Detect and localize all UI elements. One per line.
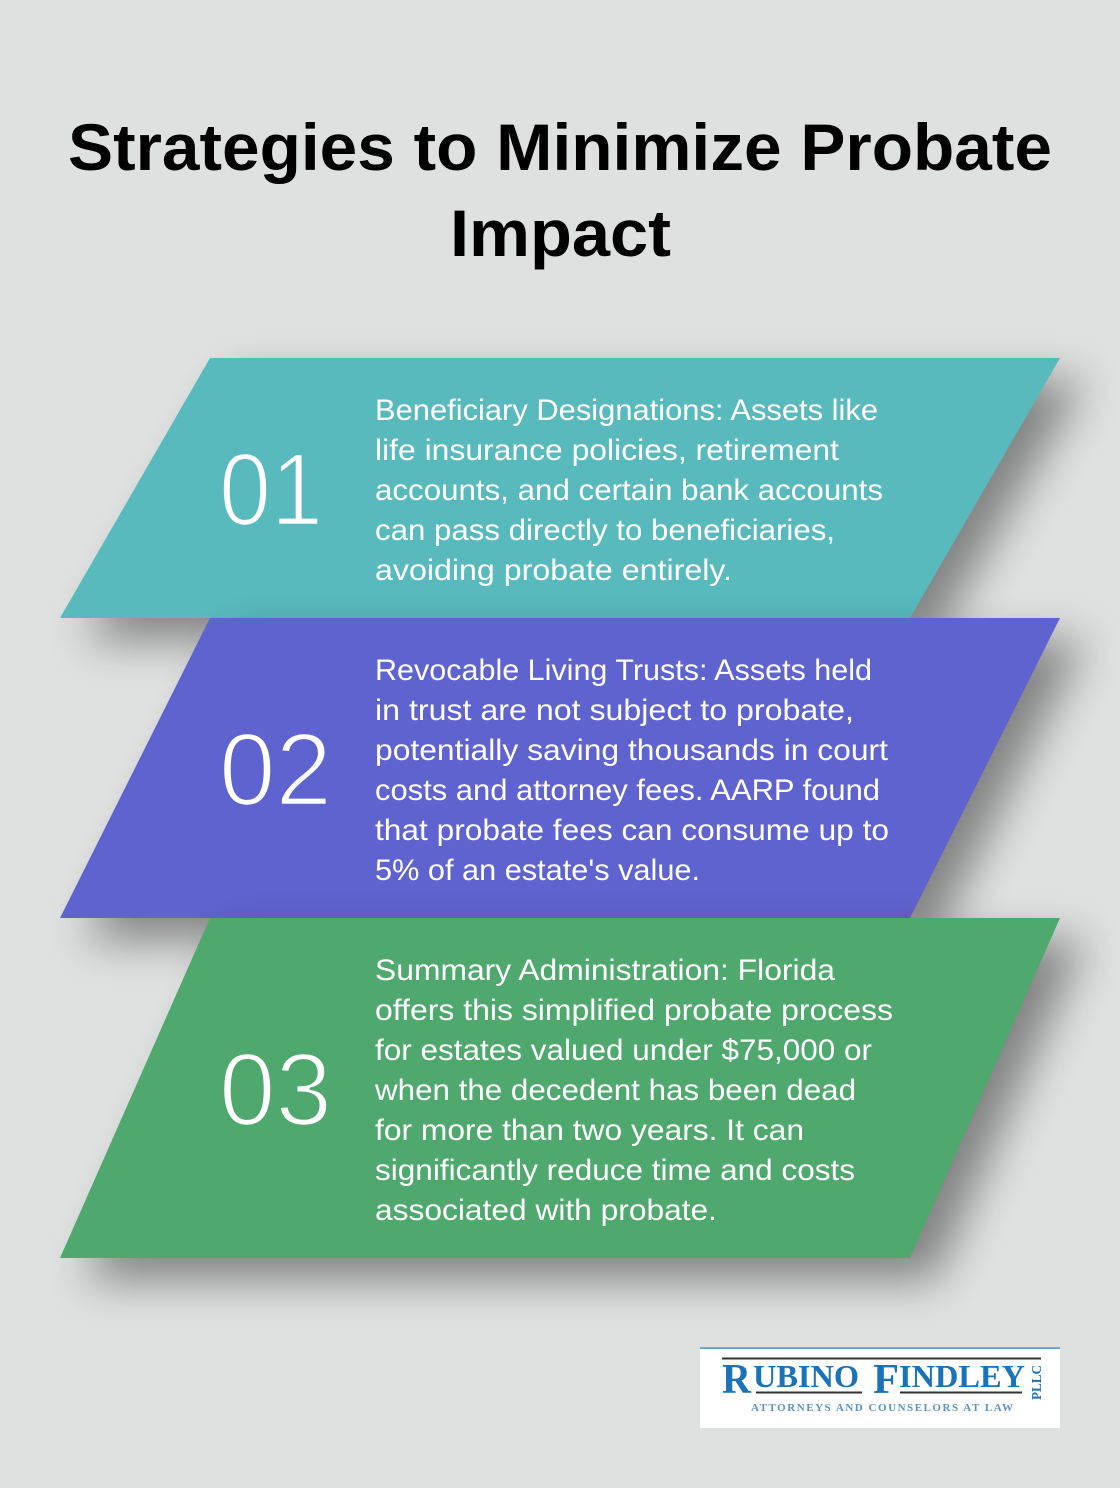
logo: Rubino Findley PLLC: F xyxy=(873,1357,899,1403)
title: Impact xyxy=(450,196,671,270)
text: beneficiary designations: can pass directly to beneficiaries, xyxy=(375,514,835,547)
text: summary administration: Summary Administration: Florida xyxy=(375,954,835,987)
text: summary administration: for more than two years. It can xyxy=(375,1114,804,1147)
text: summary administration: associated with probate. xyxy=(375,1194,717,1227)
panel: step 3 summary administration xyxy=(60,918,1060,1258)
text: revocable living trusts: 5% of an estate's value. xyxy=(375,854,700,887)
number 01: 01 xyxy=(219,432,323,547)
text: revocable living trusts: potentially saving thousands in court xyxy=(375,734,889,767)
text: summary administration: significantly reduce time and costs xyxy=(375,1154,855,1187)
logo: Rubino Findley PLLC: ATTORNEYS AND COUNSELORS AT LAW xyxy=(751,1402,1013,1414)
text: beneficiary designations xyxy=(375,394,883,587)
logo: Rubino Findley PLLC xyxy=(700,1348,1060,1428)
logo: Rubino Findley PLLC: R xyxy=(722,1357,752,1403)
green parallelogram xyxy=(60,918,1060,1258)
text: beneficiary designations: avoiding probate entirely. xyxy=(375,554,732,587)
text: revocable living trusts: costs and attorney fees. AARP found xyxy=(375,774,880,807)
teal parallelogram xyxy=(60,358,1060,618)
title: Strategies to Minimize Probate xyxy=(68,110,1052,184)
text: summary administration xyxy=(374,954,893,1227)
purple parallelogram xyxy=(60,618,1060,918)
number 02: 02 xyxy=(219,712,332,827)
text: summary administration: for estates valued under $75,000 or xyxy=(375,1034,872,1067)
text: revocable living trusts: that probate fees can consume up to xyxy=(375,814,889,847)
title xyxy=(68,110,1052,270)
text: summary administration: when the decedent has been dead xyxy=(374,1074,856,1107)
logo: Rubino Findley PLLC: PLLC xyxy=(1030,1365,1045,1400)
text: beneficiary designations: Beneficiary Designations: Assets like xyxy=(375,394,878,427)
text: revocable living trusts: Revocable Living Trusts: Assets held xyxy=(375,654,872,687)
number 03: 03 xyxy=(219,1032,332,1147)
logo: Rubino Findley PLLC: INDLEY xyxy=(899,1358,1025,1394)
panel: step 1 beneficiary designations xyxy=(60,358,1060,618)
logo: Rubino Findley PLLC: UBINO xyxy=(753,1358,859,1394)
text: beneficiary designations: life insurance policies, retirement xyxy=(375,434,840,467)
panel: step 2 revocable living trusts xyxy=(60,618,1060,918)
text: revocable living trusts: in trust are not subject to probate, xyxy=(375,694,854,727)
text: revocable living trusts xyxy=(375,654,889,887)
text: beneficiary designations: accounts, and certain bank accounts xyxy=(375,474,883,507)
text: summary administration: offers this simplified probate process xyxy=(375,994,893,1027)
